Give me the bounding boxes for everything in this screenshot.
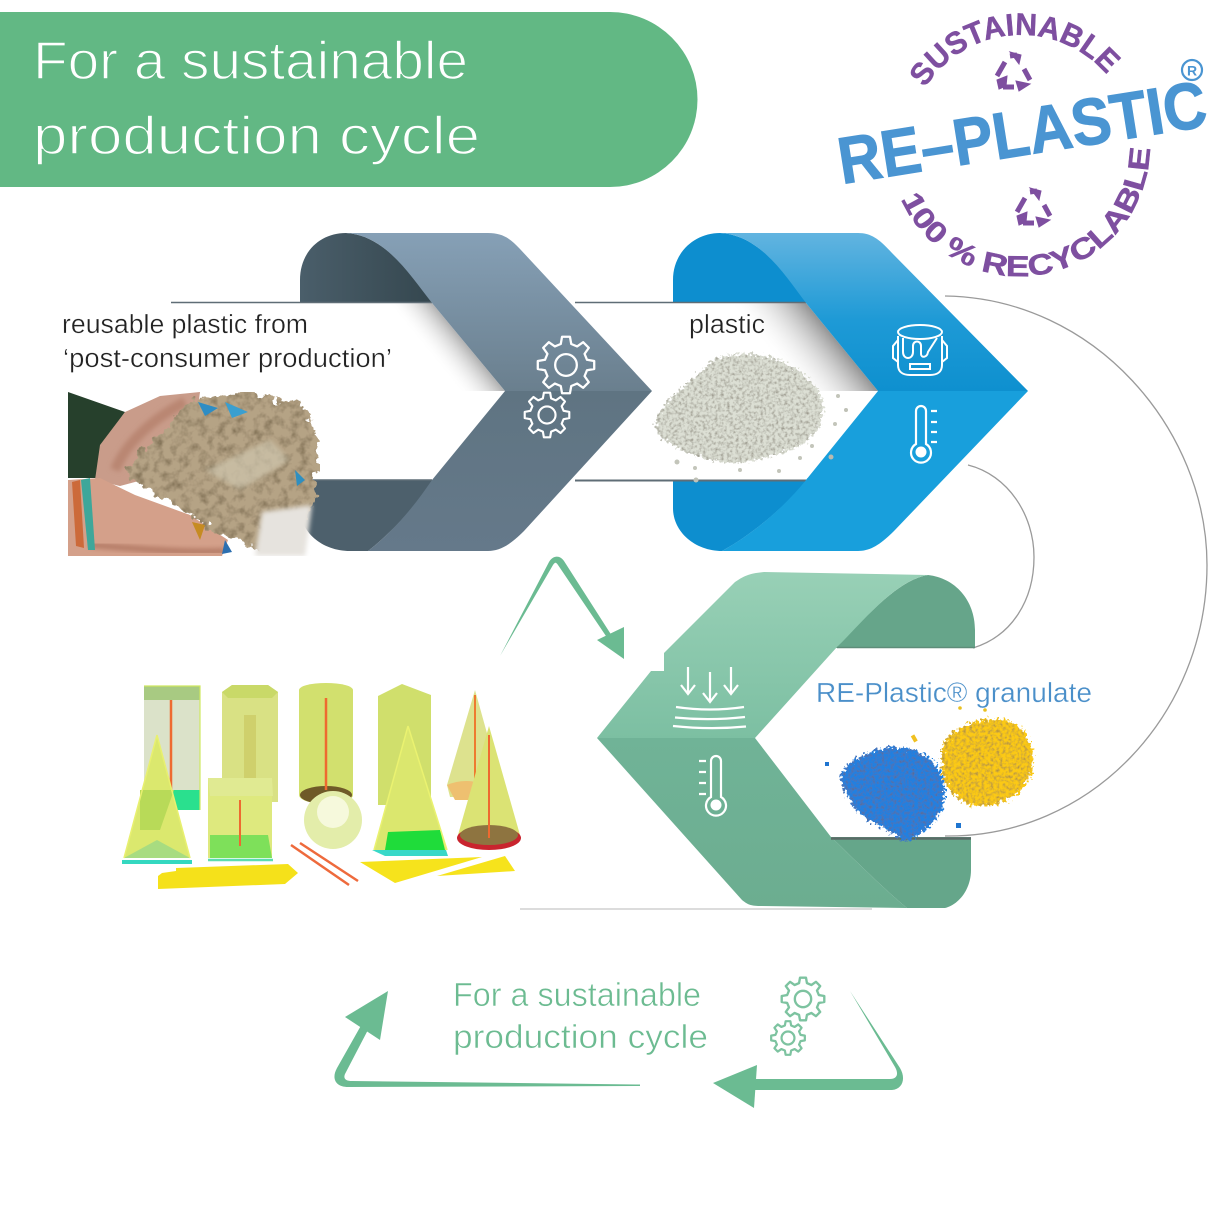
text: reusable plastic: reusable plastic from — [62, 311, 308, 339]
connector: short arc — [968, 465, 1034, 648]
arrow: top green arrow — [500, 557, 624, 659]
arrow head — [713, 1065, 757, 1108]
solid: square prism — [144, 686, 200, 810]
arrow head — [597, 627, 624, 659]
photo: translucent geometric solids — [122, 683, 521, 889]
text: RE-Plastic granulate: RE-Plastic® granulate — [816, 677, 1092, 708]
text: reusable plastic — [62, 311, 392, 373]
green back band bottom — [831, 837, 971, 908]
icon: small gear — [525, 393, 569, 437]
text: sustainable production cycle (green) — [453, 976, 708, 1055]
title banner: For a sustainable — [33, 31, 468, 91]
icon: pressure arrows — [673, 667, 746, 728]
title banner — [0, 12, 698, 187]
icon: recycle bottom — [1017, 188, 1050, 227]
green front band top — [597, 572, 928, 738]
grey front band top — [346, 233, 652, 391]
solid: triangular prism — [378, 684, 431, 805]
yellow flat strips — [158, 864, 298, 889]
solid: rear hexagonal pyramid — [447, 690, 500, 800]
blue front band bottom — [722, 391, 1028, 551]
solid: sphere — [304, 791, 362, 849]
photo: blue granulate — [825, 747, 961, 842]
logo text: 100 % recyclable: 100 % RECYCLABLE — [901, 148, 1150, 277]
photo: hands holding plastic waste — [68, 392, 318, 556]
photo: white plastic pellets — [656, 354, 848, 482]
logo registered mark — [1182, 60, 1202, 80]
icon: thermometer blue — [911, 406, 937, 463]
panel: grey chevron — [171, 233, 652, 551]
solid: cube — [208, 778, 273, 860]
icon: recycle top — [997, 52, 1030, 91]
text: sustainable production cycle (green): For a sustainable — [453, 976, 701, 1013]
panel: blue chevron — [575, 233, 1028, 551]
plastic panel — [575, 302, 878, 480]
text: reusable plastic: ‘post-consumer production’ — [63, 345, 392, 373]
solid: left pyramid — [122, 735, 192, 864]
icon: green gear small — [771, 1021, 805, 1055]
icon: large gear — [538, 337, 594, 393]
orange rods — [291, 843, 358, 885]
icon: thermometer green — [699, 756, 726, 816]
logo text: sustainable: SUSTAINABLE — [910, 13, 1122, 85]
solid: hexagonal prism — [222, 685, 278, 802]
icon: green gear large — [782, 978, 824, 1020]
arrow: bottom left green — [334, 991, 640, 1087]
grey back band bottom — [300, 480, 436, 551]
blue back band bottom — [673, 478, 810, 551]
reusable plastic panel — [171, 302, 505, 480]
green front band bottom — [597, 738, 907, 908]
green back band top — [835, 575, 975, 648]
logo: RE-Plastic badge — [833, 13, 1212, 277]
solid: cylinder — [299, 683, 353, 804]
base line under green chevron — [520, 908, 872, 910]
grey back band top — [300, 233, 436, 303]
text: sustainable production cycle (green): production cycle — [453, 1018, 708, 1055]
blue front band top — [720, 233, 1028, 391]
title banner: production cycle — [33, 106, 480, 166]
solid: front cone — [457, 726, 521, 850]
text: plastic: plastic — [689, 311, 765, 339]
yellow triangles — [360, 856, 515, 883]
connector: long arc — [945, 296, 1207, 836]
photo: yellow granulate — [911, 706, 1033, 806]
icon: paint can — [893, 325, 947, 375]
arrow head — [345, 991, 388, 1040]
blue back band top — [673, 233, 810, 303]
solid: centre pyramid — [372, 726, 448, 856]
grey front band bottom — [368, 391, 652, 551]
arrow: bottom right green — [713, 991, 903, 1108]
panel: green chevron — [597, 572, 975, 908]
logo registered mark: R — [1187, 62, 1197, 78]
